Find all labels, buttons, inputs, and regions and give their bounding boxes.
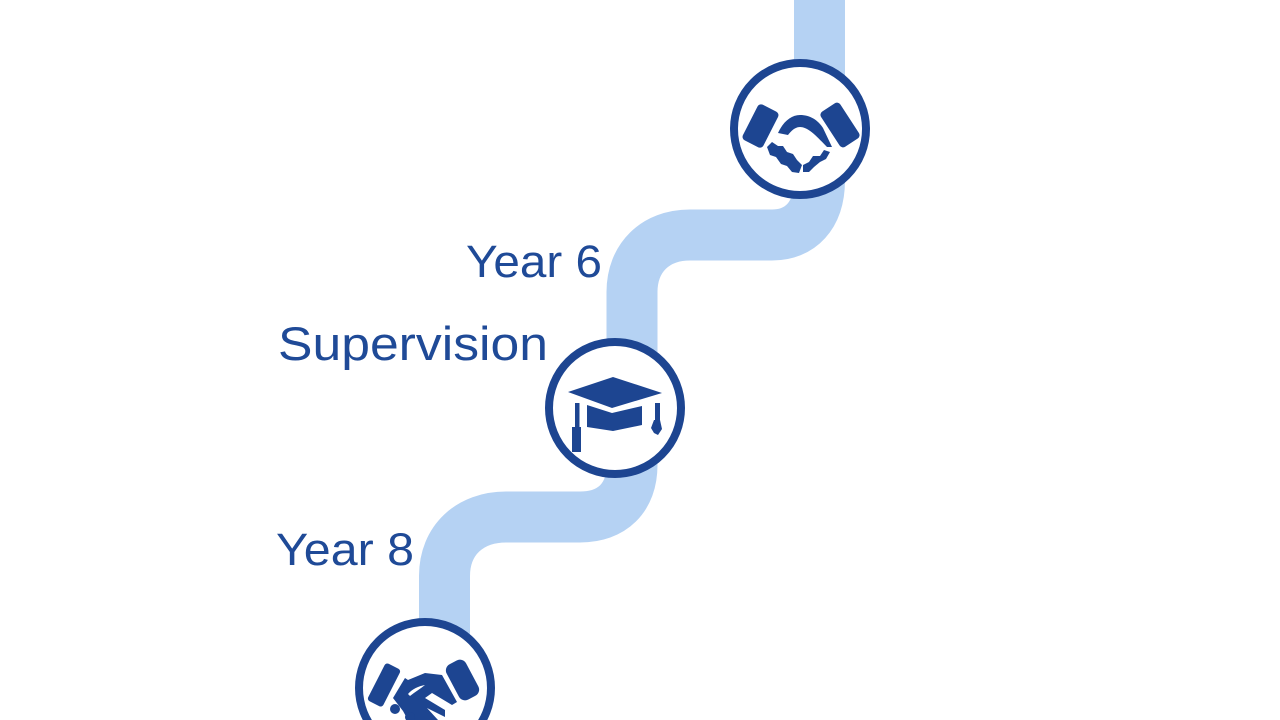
icon: handshake outline, top bbox=[734, 63, 866, 195]
label: Year 8: Year 8 bbox=[276, 524, 414, 575]
winding path bbox=[444, 0, 820, 660]
icon: handshake filled, bottom bbox=[359, 622, 491, 720]
label: Year 6: Year 6 bbox=[466, 236, 602, 287]
handshake highlight bbox=[408, 685, 425, 696]
label: Supervision: Supervision bbox=[278, 317, 548, 370]
icon: graduation cap bbox=[549, 342, 681, 474]
